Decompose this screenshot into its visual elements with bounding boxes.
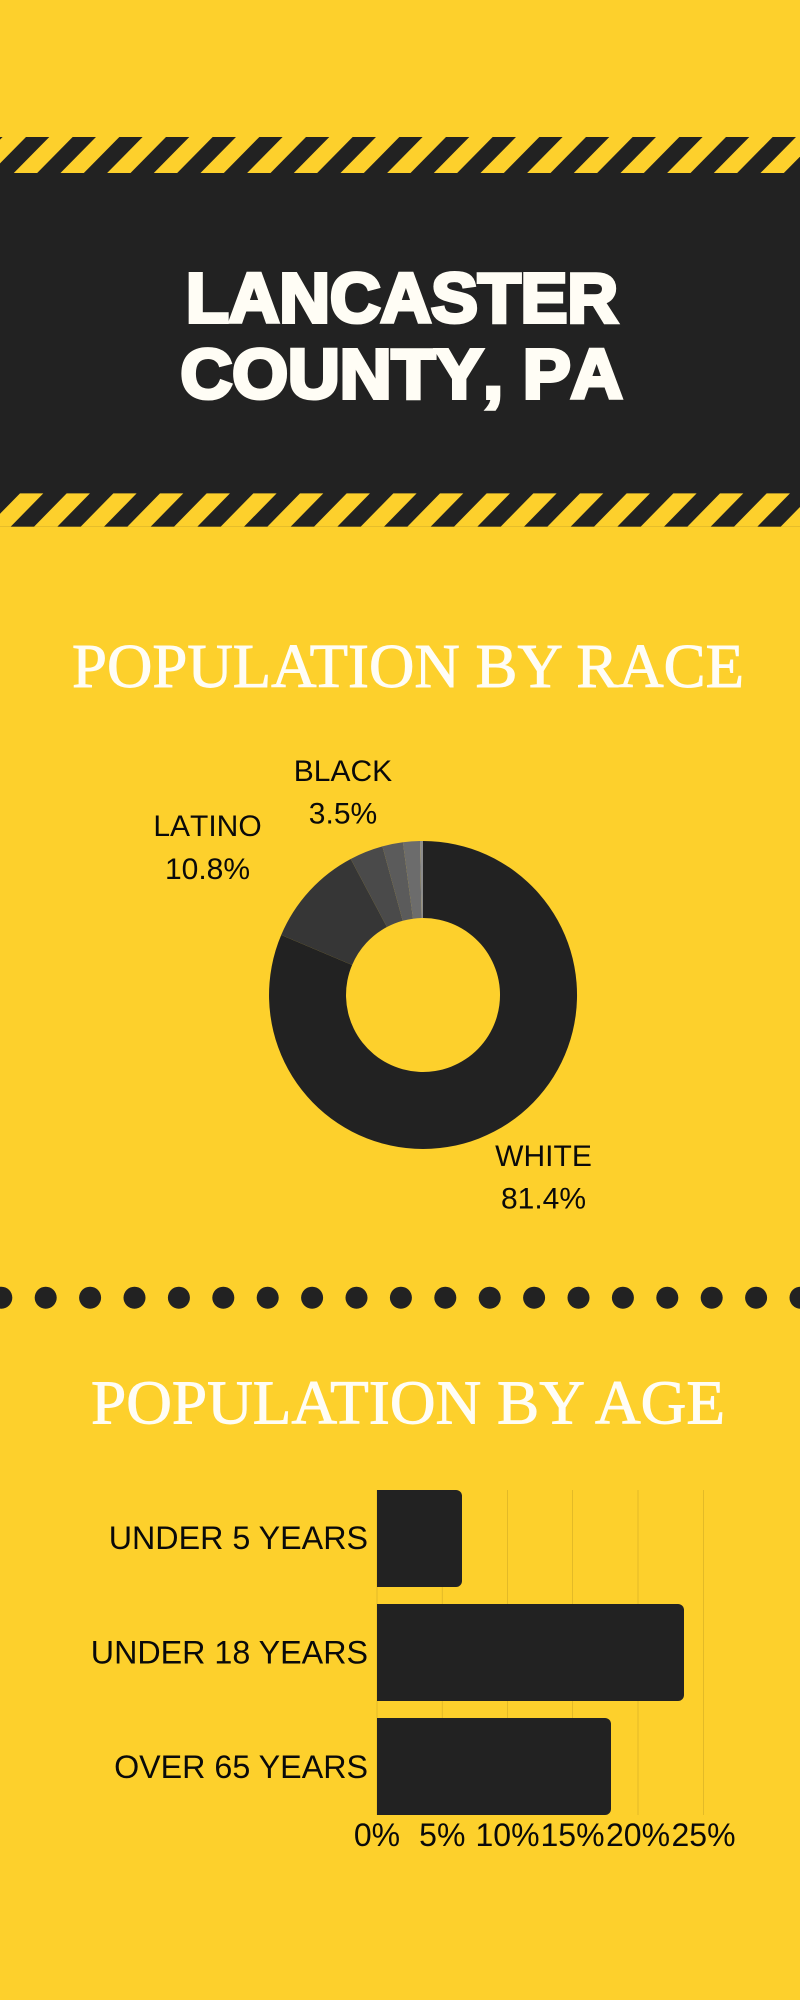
axis tick labels: 15% xyxy=(540,1817,605,1853)
label: black: BLACK xyxy=(294,755,392,788)
hazard stripes: top xyxy=(0,137,800,173)
slice: other xyxy=(382,842,413,921)
axis tick labels: 25% xyxy=(671,1817,736,1853)
bar: under 18 years xyxy=(377,1604,684,1701)
axis tick labels: 5% xyxy=(419,1817,465,1853)
category labels: UNDER 5 YEARS xyxy=(109,1520,368,1556)
title: COUNTY, PA xyxy=(180,335,622,413)
slice: white xyxy=(269,841,577,1149)
category labels: OVER 65 YEARS xyxy=(114,1749,368,1785)
donut chart: population by race xyxy=(269,841,577,1149)
category labels xyxy=(91,1520,368,1785)
slice: latino xyxy=(281,859,387,965)
label: latino: 10.8% xyxy=(165,853,250,886)
slice: black xyxy=(351,846,403,927)
axis tick labels: 10% xyxy=(475,1817,540,1853)
header band xyxy=(0,137,800,527)
axis tick labels xyxy=(354,1817,736,1853)
hazard stripes: bottom xyxy=(0,493,800,527)
bar: under 5 years xyxy=(377,1490,462,1587)
label: white: 81.4% xyxy=(501,1182,586,1216)
label: latino: LATINO xyxy=(153,810,262,843)
slice: other xyxy=(403,841,422,919)
axis tick labels: 20% xyxy=(606,1817,670,1853)
bar chart: population by age xyxy=(91,1490,736,1853)
label: white: WHITE xyxy=(495,1140,592,1173)
heading: population by race: POPULATION BY RACE xyxy=(72,633,744,701)
axis tick labels: 0% xyxy=(354,1817,400,1853)
title xyxy=(180,259,622,413)
slice: other xyxy=(420,841,423,918)
title: LANCASTER xyxy=(186,259,618,337)
category labels: UNDER 18 YEARS xyxy=(91,1634,368,1670)
bar: over 65 years xyxy=(377,1718,611,1815)
heading: population by age: POPULATION BY AGE xyxy=(91,1370,725,1438)
dotted divider xyxy=(0,1287,800,1309)
label: black: 3.5% xyxy=(309,798,377,830)
